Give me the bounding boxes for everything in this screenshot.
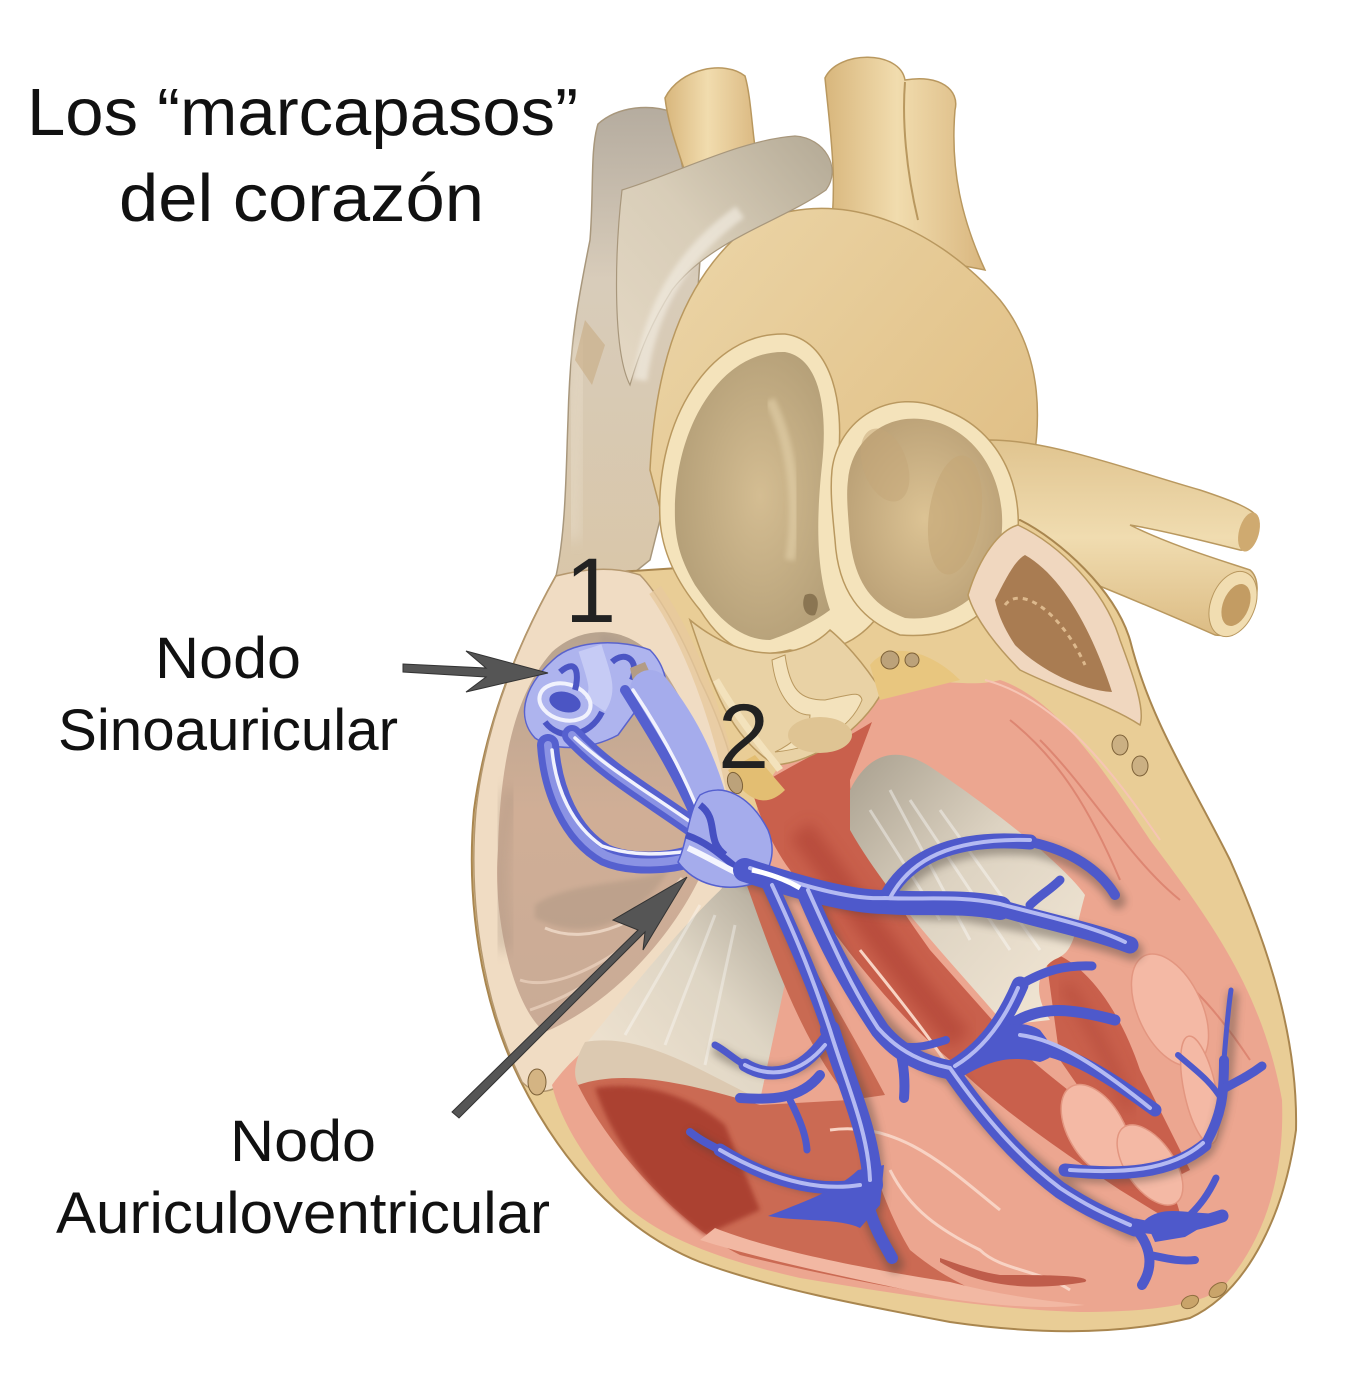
pulmonary valve cross section bbox=[968, 525, 1141, 725]
brachiocephalic trunk bbox=[665, 68, 760, 230]
lower chamber stripe bbox=[940, 1258, 1086, 1287]
left carotid and subclavian arteries bbox=[825, 57, 985, 270]
superior vena cava bbox=[556, 108, 700, 600]
pathway highlights bbox=[720, 840, 1203, 1225]
heart body fat layer bbox=[472, 520, 1296, 1331]
tricuspid valve leaflets bbox=[585, 868, 790, 1100]
atrial wall bbox=[474, 569, 745, 1091]
conduction system shadow bbox=[693, 847, 1233, 1264]
ventricular myocardium base bbox=[552, 680, 1282, 1312]
left ventricle wall bbox=[985, 680, 1250, 1060]
right atrium cavity bbox=[497, 632, 710, 1032]
atrioventricular node bbox=[678, 790, 772, 887]
digit 1: 1 bbox=[565, 540, 616, 642]
pulmonary trunk opening bbox=[831, 402, 1018, 636]
right ventricle muscle wall bbox=[578, 1078, 1010, 1305]
title bbox=[27, 75, 578, 236]
aortic opening bbox=[660, 334, 875, 654]
left coronary vessels bbox=[725, 651, 960, 800]
arrow: to sinoatrial node bbox=[403, 651, 548, 692]
conduction system: blue pathways bbox=[524, 643, 1262, 1285]
arrow: to atrioventricular node bbox=[452, 877, 687, 1118]
ventricular septal red band bbox=[745, 722, 1190, 1230]
lower wall pale stripe bbox=[700, 1228, 1085, 1307]
label: Nodo Sinoauricular bbox=[58, 626, 398, 763]
label: Nodo Auriculoventricular bbox=[56, 1109, 550, 1246]
title: del corazón bbox=[119, 161, 484, 236]
aortic root bbox=[690, 620, 882, 770]
pulmonary arteries bbox=[990, 440, 1266, 644]
mitral valve chordae bbox=[850, 755, 1085, 1025]
aortic arch bbox=[650, 208, 1037, 660]
coronary vessels at base and apex bbox=[528, 735, 1230, 1311]
branch wedges bbox=[768, 1024, 1225, 1242]
heart illustration bbox=[472, 57, 1296, 1331]
label: Nodo Sinoauricular: Sinoauricular bbox=[58, 698, 398, 763]
label: Nodo Sinoauricular: Nodo bbox=[155, 626, 301, 691]
brachiocephalic vein bbox=[617, 136, 832, 385]
ventricular trabeculae bbox=[1047, 942, 1227, 1216]
label: Nodo Auriculoventricular: Auriculoventricular bbox=[56, 1181, 550, 1246]
title: Los “marcapasos” bbox=[27, 75, 578, 150]
sinoatrial node bbox=[524, 643, 667, 747]
label: Nodo Auriculoventricular: Nodo bbox=[230, 1109, 376, 1174]
digit 2: 2 bbox=[718, 686, 769, 788]
bundle branches and Purkinje fibres bbox=[690, 841, 1262, 1285]
internodal tracts bbox=[548, 690, 725, 863]
